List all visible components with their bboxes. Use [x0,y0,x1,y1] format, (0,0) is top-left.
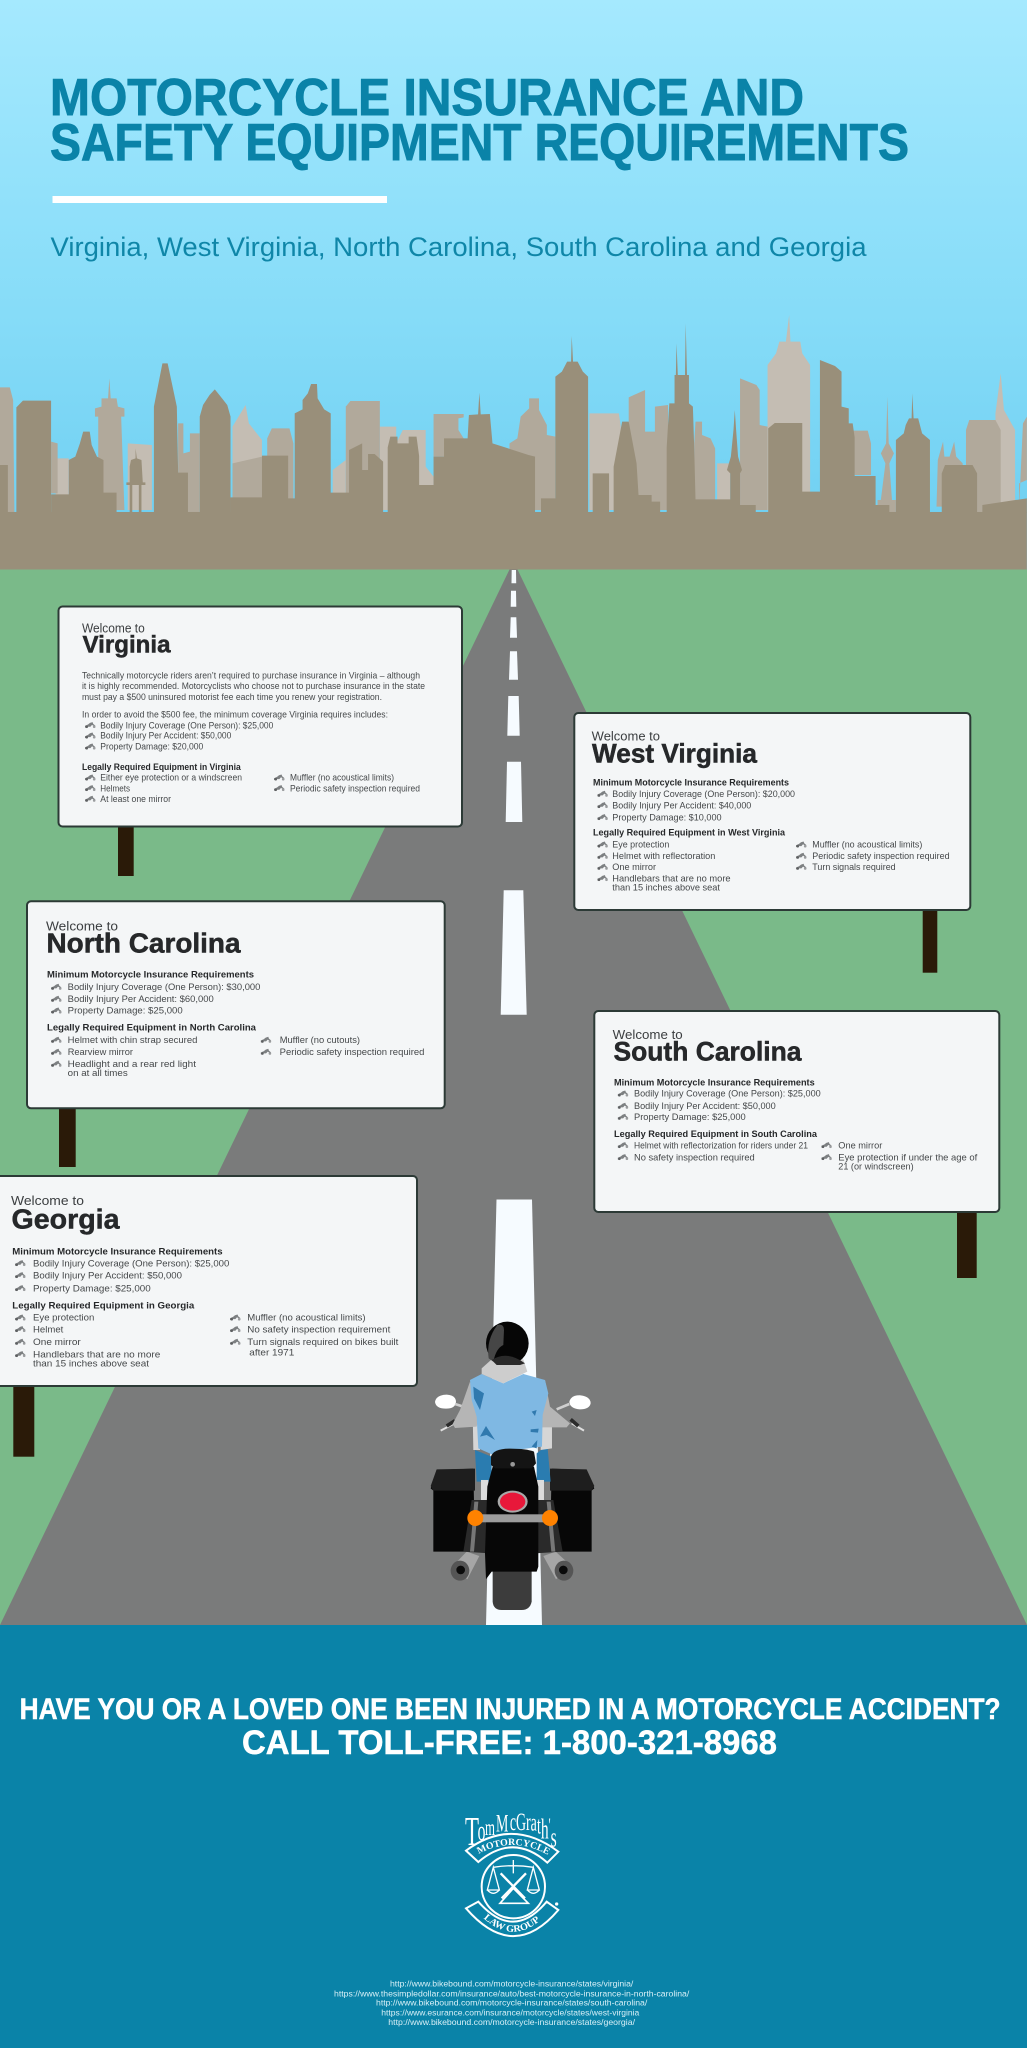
sign: West Virginia [574,713,970,973]
sign: Virginia: it is highly recommended. Motorcyclists who choose not to purchase insurance in the state [82,681,425,691]
title: MOTORCYCLE INSURANCE AND [50,69,804,127]
green ground [0,570,1027,1626]
title [50,69,909,172]
sign: North Carolina: Legally Required Equipment in North Carolina [47,1022,257,1033]
source links: http://www.bikebound.com/motorcycle-insurance/states/virginia/ [390,1979,634,1989]
sign: West Virginia: Muffler (no acoustical limits) [812,839,922,850]
sign: South Carolina: South Carolina [614,1037,802,1067]
sign: South Carolina [594,1011,999,1278]
call to action band [0,1625,1027,2048]
sign: North Carolina: Property Damage: $25,000 [68,1005,183,1016]
logo: Tom McGrath's Motorcycle Law Group: Tom McGrath's [465,1809,557,1855]
sign: West Virginia: Helmet with reflectoration [612,850,715,861]
sky background [0,0,1027,570]
sign: West Virginia: One mirror [612,861,656,872]
sign: North Carolina: Minimum Motorcycle Insurance Requirements [47,968,254,979]
sign: Virginia: Bodily Injury Per Accident: $50,000 [100,731,231,741]
sign: North Carolina: Helmet with chin strap secured [68,1034,197,1045]
sign: West Virginia: than 15 inches above seat [612,882,720,893]
sign: West Virginia: Property Damage: $10,000 [612,811,722,822]
sign: South Carolina: Property Damage: $25,000 [634,1111,746,1122]
logo: Tom McGrath's Motorcycle Law Group [464,1809,560,1938]
sign: West Virginia: West Virginia [592,738,757,768]
sign: North Carolina: on at all times [68,1067,128,1078]
sign: West Virginia: Handlebars that are no more [612,872,731,883]
sign: South Carolina: Welcome to [613,1028,683,1042]
sign: Virginia: At least one mirror [100,794,171,804]
title: SAFETY EQUIPMENT REQUIREMENTS [50,114,909,172]
logo: Tom McGrath's Motorcycle Law Group: MOTORCYCLE [476,1838,550,1855]
source links [334,1979,690,2027]
sign: Georgia: One mirror [33,1336,81,1347]
sign: North Carolina: Headlight and a rear red light [68,1058,196,1069]
sign: Virginia: Either eye protection or a windscreen [100,773,242,783]
city skyline [0,315,1027,573]
sign: Georgia: Helmet [33,1323,64,1334]
sign: West Virginia: Periodic safety inspection required [812,850,950,861]
sign: South Carolina: Bodily Injury Per Accident: $50,000 [634,1100,776,1111]
sign: Georgia: Eye protection [33,1312,94,1323]
source links: https://www.esurance.com/insurance/motorcycle/states/west-virginia [381,2008,640,2018]
sign: Virginia: Muffler (no acoustical limits) [290,773,394,783]
sign: Georgia: Welcome to [11,1194,84,1208]
sign: South Carolina: 21 (or windscreen) [838,1161,914,1172]
sign: Georgia: No safety inspection requirement [247,1323,391,1334]
sign: South Carolina: One mirror [838,1139,882,1150]
sign: North Carolina: North Carolina [46,928,241,959]
sign: West Virginia: Turn signals required [812,861,896,872]
sign: South Carolina: Eye protection if under the age of [838,1151,978,1162]
sign: West Virginia: Welcome to [592,730,660,744]
sign: Georgia: than 15 inches above seat [33,1358,149,1369]
sign: West Virginia: Eye protection [612,839,669,850]
title underline [52,196,387,203]
source links: http://www.bikebound.com/motorcycle-insurance/states/south-carolina/ [376,1998,648,2008]
sign: Virginia: Welcome to [82,622,145,636]
sign: West Virginia: Minimum Motorcycle Insurance Requirements [593,777,789,788]
sign: Georgia: Bodily Injury Coverage (One Person): $25,000 [33,1257,229,1268]
road [0,570,1027,1625]
sign: Georgia: after 1971 [249,1347,294,1358]
sign: North Carolina: Bodily Injury Coverage (One Person): $30,000 [68,981,260,992]
sign: West Virginia: Bodily Injury Per Accident: $40,000 [612,799,751,810]
sign: Virginia: Property Damage: $20,000 [100,742,203,752]
sign: Virginia: In order to avoid the $500 fee, the minimum coverage Virginia requires includes: [82,709,388,719]
source links: http://www.bikebound.com/motorcycle-insurance/states/georgia/ [388,2017,636,2027]
call to action text: CALL TOLL-FREE: 1-800-321-8968 [242,1724,777,1762]
sign: Georgia: Georgia [12,1203,120,1234]
sign: Georgia: Turn signals required on bikes built [247,1336,399,1347]
motorcycle and rider [431,1322,594,1610]
sign: West Virginia: Bodily Injury Coverage (One Person): $20,000 [612,788,795,799]
sign: North Carolina: Muffler (no cutouts) [280,1034,360,1045]
sign: Georgia [0,1176,417,1457]
sign: South Carolina: Bodily Injury Coverage (One Person): $25,000 [634,1088,821,1099]
sign: Georgia: Bodily Injury Per Accident: $50,000 [33,1269,182,1280]
sign: Georgia: Muffler (no acoustical limits) [247,1312,366,1323]
sign: North Carolina [27,901,445,1167]
sign: Georgia: Property Damage: $25,000 [33,1282,151,1293]
sign: South Carolina: Helmet with reflectorization for riders under 21 [634,1139,808,1150]
sign: Virginia: Helmets [100,783,131,793]
sign: Virginia [58,606,462,876]
sign: Georgia: Handlebars that are no more [33,1348,160,1359]
sign: West Virginia: Legally Required Equipment in West Virginia [593,827,786,838]
sign: Georgia: Legally Required Equipment in Georgia [12,1299,195,1310]
logo: Tom McGrath's Motorcycle Law Group: LAW GROUP [484,1914,538,1932]
subtitle: Virginia, West Virginia, North Carolina, South Carolina and Georgia [50,232,867,262]
sign: North Carolina: Rearview mirror [68,1046,133,1057]
sign: Virginia: Technically motorcycle riders aren’t required to purchase insurance in Virginia – although [82,671,420,681]
call to action text [20,1693,1001,1762]
sign: Virginia: Legally Required Equipment in Virginia [82,761,241,772]
sign: South Carolina: No safety inspection required [634,1151,755,1162]
source links: https://www.thesimpledollar.com/insurance/auto/best-motorcycle-insurance-in-north-carolina/ [334,1988,690,1998]
sign: Georgia: Minimum Motorcycle Insurance Requirements [12,1245,223,1256]
sign: North Carolina: Periodic safety inspection required [280,1046,424,1057]
sign: Virginia: Bodily Injury Coverage (One Person): $25,000 [100,720,273,730]
sign: North Carolina: Welcome to [46,919,118,933]
sign: Virginia: Periodic safety inspection required [290,783,420,793]
sign: Virginia: Virginia [82,631,171,658]
road centre dashes [486,570,542,1625]
sign: South Carolina: Legally Required Equipment in South Carolina [614,1128,818,1139]
sign: Virginia: must pay a $500 uninsured motorist fee each time you renew your registration. [82,692,382,702]
sign: North Carolina: Bodily Injury Per Accident: $60,000 [68,993,214,1004]
sign: South Carolina: Minimum Motorcycle Insurance Requirements [614,1076,815,1087]
